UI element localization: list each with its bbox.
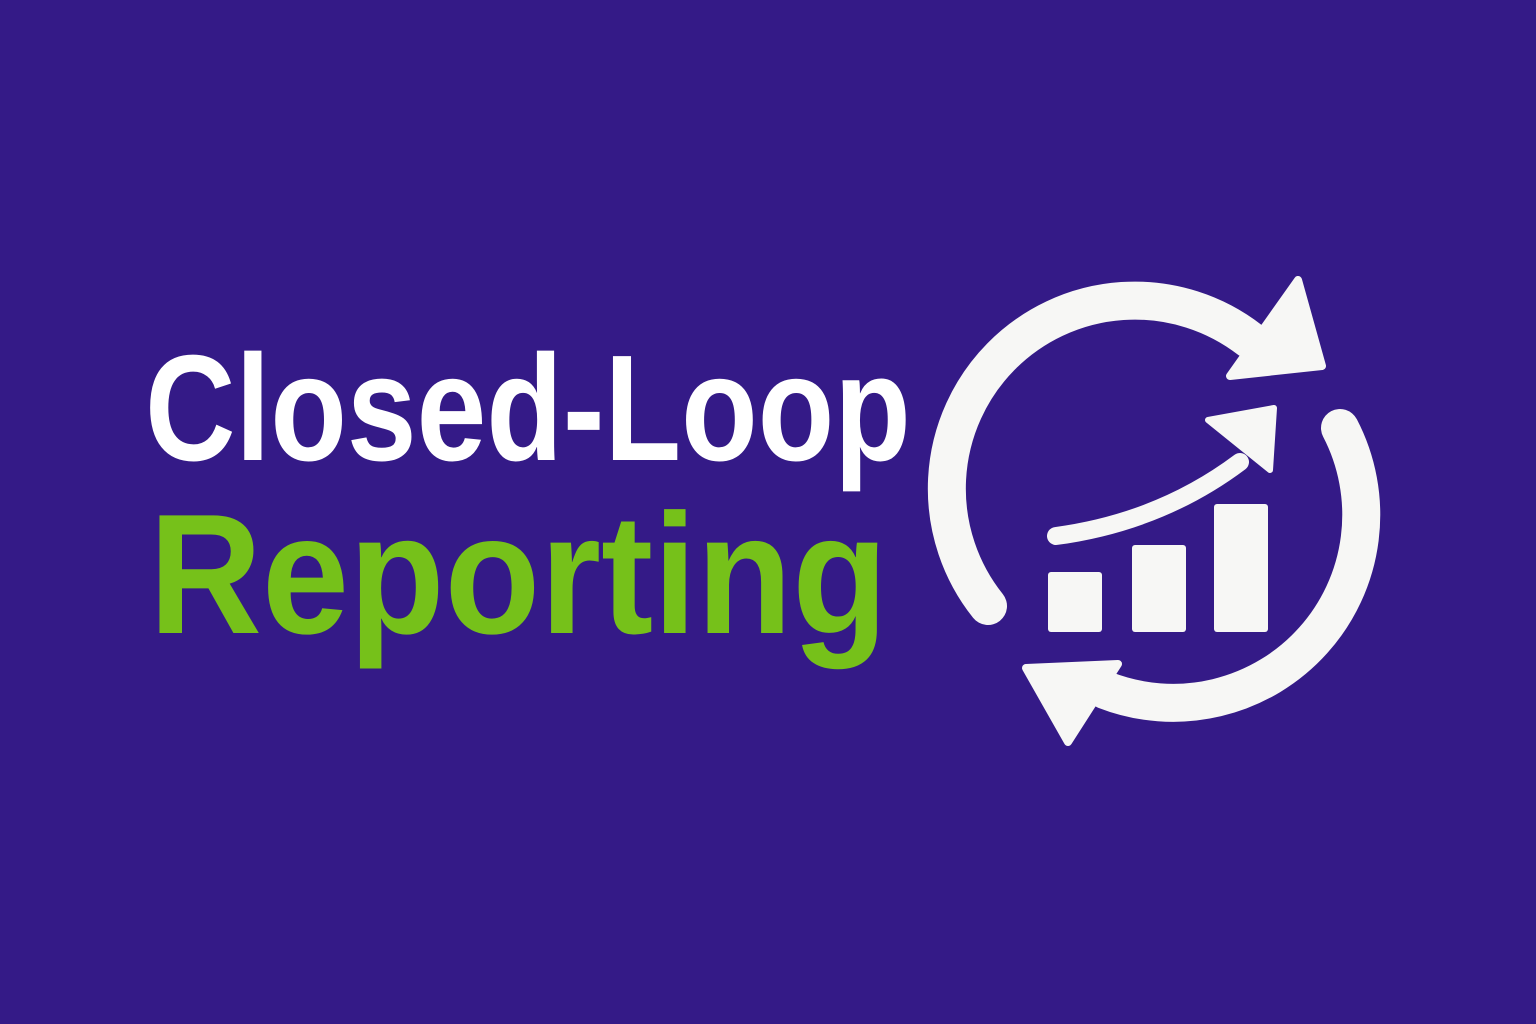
title: Closed-Loop: Closed-Loop — [145, 323, 911, 492]
icon: bar chart — [1048, 504, 1268, 632]
icon: trend arrow — [1056, 408, 1274, 536]
icon: lower loop arrow — [1026, 428, 1361, 742]
icon: upper loop arrow — [947, 280, 1322, 606]
title: Reporting: Reporting — [149, 479, 888, 670]
